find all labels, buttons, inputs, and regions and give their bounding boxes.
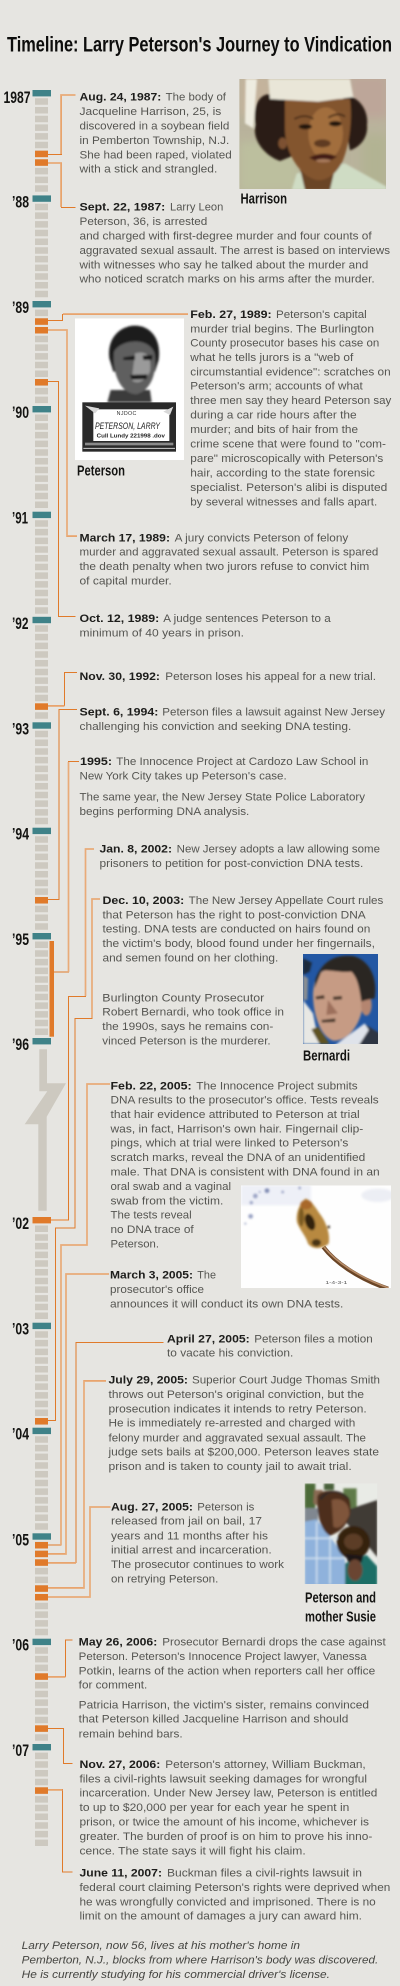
event: Sept. 22, 1987: aggravated sexual assault. The arrest is based on interviews: [80, 245, 390, 257]
year labels: ’06: [12, 1637, 29, 1655]
text: Burlington County Prosecutor: vinced Peterson is the murderer.: [102, 1035, 271, 1047]
event: Oct. 12, 1989: minimum of 40 years in prison.: [80, 627, 244, 639]
closing italic note: [22, 1940, 378, 1981]
event: Aug. 24, 1987: in Pemberton Township, N.J.: [80, 135, 229, 147]
time break lightning shape: [25, 1049, 66, 1211]
event: Feb. 22, 2005: pings, which at trial were linked to Peterson's: [110, 1138, 348, 1150]
text: Burlington County Prosecutor: Burlington County Prosecutor: [102, 992, 265, 1004]
event: Feb. 27, 1989: murder trial begins. The Burlington: [190, 323, 374, 335]
event: July 29, 2005: [107, 1374, 380, 1473]
event: Sept. 22, 1987: Sept. 22, 1987:: [80, 202, 165, 214]
year labels: [4, 89, 30, 1760]
event: Feb. 22, 2005: swab from the victim.: [110, 1195, 223, 1207]
event: Aug. 27, 2005: Peterson is: [197, 1501, 254, 1513]
event: Feb. 27, 1989: during a car ride hours after the: [190, 410, 357, 422]
photo: Bernardi: [303, 954, 380, 1047]
event: May 26, 2006: Prosecutor Bernardi drops the case against: [162, 1637, 386, 1649]
text: Burlington County Prosecutor: Robert Bernardi, who took office in: [102, 1007, 284, 1019]
event: Nov. 27, 2006: cence. The state says it will fight his claim.: [80, 1845, 306, 1857]
photo: Harrison: [239, 75, 388, 192]
photo: Peterson mugshot: PETERSON, LARRY: [95, 421, 161, 431]
event: Feb. 22, 2005: scratch marks, reveal the DNA of an unidentified: [110, 1152, 365, 1164]
event: Nov. 30, 1992: Peterson loses his appeal for a new trial.: [165, 671, 376, 683]
event: Feb. 27, 1989: specialist. Peterson's alibi is disputed: [190, 482, 387, 494]
event: May 26, 2006: Peterson. Peterson's Innocence Project lawyer, Vanessa: [79, 1651, 367, 1663]
year labels: ’05: [12, 1531, 29, 1549]
monthly grey ticks: [35, 98, 48, 1846]
event: March 17, 1989: murder and aggravated sexual assault. Peterson is spared: [80, 547, 378, 559]
photo: hair root micrograph: [241, 1185, 395, 1289]
event: Nov. 30, 1992: Nov. 30, 1992:: [80, 671, 160, 683]
year labels: ’03: [12, 1321, 29, 1339]
event: June 11, 2007: limit on the amount of damages a jury can award him.: [80, 1911, 362, 1923]
text: Burlington County Prosecutor: the 1990s, says he remains con-: [102, 1021, 274, 1033]
event: Feb. 27, 1989: crime scene that were found to "com-: [190, 439, 387, 451]
event: Nov. 27, 2006: greater. The burden of proof is on him to prove his inno-: [80, 1831, 373, 1843]
event: Feb. 22, 2005: oral swab and a vaginal: [110, 1181, 231, 1193]
event: Feb. 27, 1989: [189, 309, 392, 508]
year labels: ’90: [12, 404, 29, 422]
event: Oct. 12, 1989: A judge sentences Peterson to a: [163, 613, 331, 625]
event: March 17, 1989: the death penalty when two jurors refuse to convict him: [80, 561, 369, 573]
event: Nov. 30, 1992: [80, 671, 376, 683]
event: Dec. 10, 2003: The New Jersey Appellate Court rules: [189, 895, 383, 907]
event: Sept. 22, 1987: Peterson, 36, is arrested: [80, 216, 207, 228]
event: Aug. 27, 2005: years and 11 months after his: [111, 1530, 268, 1542]
year labels: ’04: [12, 1426, 30, 1444]
event: July 29, 2005: throws out Peterson's original conviction, but the: [108, 1389, 364, 1401]
event: Jan. 8, 2002: prisoners to petition for post-conviction DNA tests.: [100, 858, 363, 870]
event: Feb. 22, 2005: The tests reveal: [110, 1210, 192, 1222]
event: Sept. 6, 1994: [80, 706, 386, 733]
teal year markers: [32, 90, 51, 1750]
year labels: ’94: [12, 826, 30, 844]
event: Aug. 24, 1987: Jacqueline Harrison, 25, is: [80, 106, 221, 118]
event: Aug. 27, 2005: [111, 1501, 285, 1586]
year labels: 1987: [4, 89, 30, 107]
event: Dec. 10, 2003: and semen found on her clothing.: [102, 952, 278, 964]
event: June 11, 2007: June 11, 2007:: [80, 1867, 162, 1879]
event: Nov. 27, 2006: [80, 1759, 377, 1857]
connector lines: [48, 95, 188, 1872]
year labels: ’91: [12, 510, 28, 528]
caption: Peterson and mother Susie: Peterson and: [305, 1590, 376, 1607]
year labels: ’88: [12, 193, 29, 211]
text: Burlington County Prosecutor: [102, 992, 284, 1047]
event: April 27, 2005: April 27, 2005:: [167, 1333, 250, 1345]
event: May 26, 2006: Potkin, learns of the action when reporters call her office: [79, 1665, 375, 1677]
caption: Bernardi: Bernardi: [303, 1048, 350, 1065]
event: Sept. 22, 1987: and charged with first-degree murder and four counts of: [80, 231, 372, 243]
event: July 29, 2005: felony murder and aggravated sexual assault. The: [108, 1432, 366, 1444]
event: Aug. 27, 2005: on retrying Peterson.: [111, 1574, 218, 1586]
event: Jan. 8, 2002: New Jersey adopts a law allowing some: [177, 844, 380, 856]
event: Aug. 24, 1987: Aug. 24, 1987:: [80, 92, 161, 104]
event: Aug. 27, 2005: released from jail on bail, 17: [111, 1516, 262, 1528]
year labels: ’07: [12, 1742, 29, 1760]
event: Feb. 27, 1989: Peterson's capital: [276, 309, 367, 321]
event: Sept. 22, 1987: who noticed scratch marks on his arms after the murder.: [78, 274, 375, 286]
event: Feb. 22, 2005: male. That DNA is consistent with DNA found in an: [110, 1167, 380, 1179]
event: Oct. 12, 1989: Oct. 12, 1989:: [80, 613, 159, 625]
event: Sept. 6, 1994: Sept. 6, 1994:: [80, 706, 158, 718]
event: Dec. 10, 2003: Dec. 10, 2003:: [102, 895, 184, 907]
event: Feb. 27, 1989: circumstantial evidence": scratches on: [190, 366, 391, 378]
event: May 26, 2006: for comment.: [79, 1680, 147, 1692]
event: May 26, 2006: [79, 1637, 386, 1740]
event: Aug. 27, 2005: The prosecutor continues to work: [111, 1559, 285, 1571]
event: Aug. 24, 1987: discovered in a soybean field: [80, 120, 229, 132]
year labels: ’92: [12, 615, 28, 633]
event: Sept. 6, 1994: Peterson files a lawsuit against New Jersey: [162, 706, 386, 718]
event: Feb. 27, 1989: three men say they heard Peterson say: [190, 395, 392, 407]
year labels: ’96: [12, 1036, 29, 1054]
event: Nov. 27, 2006: to up to $20,000 per year for each year he spent in: [80, 1802, 349, 1814]
timeline spine: [25, 90, 66, 1846]
event: March 3, 2005: March 3, 2005:: [110, 1270, 193, 1282]
orange event markers: [32, 151, 54, 1794]
event: Feb. 27, 1989: hair, according to the state forensic: [190, 468, 376, 480]
event: Aug. 27, 2005: Aug. 27, 2005:: [111, 1501, 193, 1513]
year labels: ’93: [12, 720, 29, 738]
event: March 17, 1989: of capital murder.: [80, 575, 172, 587]
photo: Peterson and mother Susie: [305, 1483, 377, 1587]
event: Aug. 24, 1987: [78, 92, 232, 176]
event: Feb. 22, 2005: [109, 1080, 380, 1251]
event: Sept. 6, 1994: challenging his conviction and seeking DNA testing.: [80, 721, 351, 733]
event: Feb. 22, 2005: that hair evidence attributed to Peterson at trial: [110, 1109, 360, 1121]
event: Nov. 27, 2006: Nov. 27, 2006:: [80, 1759, 160, 1771]
event: April 27, 2005: [167, 1333, 373, 1360]
event: Nov. 27, 2006: files a civil-rights lawsuit seeking damages for wrongful: [80, 1773, 367, 1785]
event: Aug. 24, 1987: She had been raped, violated: [80, 149, 232, 161]
event: May 26, 2006: that Peterson killed Jacqueline Harrison and should: [79, 1714, 348, 1726]
event: March 17, 1989: [80, 532, 378, 587]
event: 1995: begins performing DNA analysis.: [80, 806, 249, 818]
year labels: ’89: [12, 299, 29, 317]
event: Feb. 22, 2005: The Innocence Project submits: [196, 1080, 358, 1092]
event: Jan. 8, 2002: [100, 844, 380, 870]
event: March 17, 1989: March 17, 1989:: [80, 532, 170, 544]
event: April 27, 2005: Peterson files a motion: [254, 1333, 373, 1345]
year labels: ’02: [12, 1215, 29, 1233]
event: Feb. 22, 2005: was, in fact, Harrison's own hair. Fingernail clip-: [109, 1123, 364, 1135]
event: Dec. 10, 2003: that Peterson has the right to post-conviction DNA: [102, 909, 367, 921]
photo: hair root micrograph: 1-4-3-1: [325, 1280, 348, 1286]
event: Dec. 10, 2003: [102, 895, 383, 964]
event: 1995: [80, 756, 368, 818]
event: Nov. 27, 2006: Peterson's attorney, William Buckman,: [165, 1759, 366, 1771]
photo: Peterson mugshot: [75, 318, 184, 460]
caption: Peterson and mother Susie: [305, 1590, 376, 1626]
closing italic note: He is currently studying for his commercial driver's license.: [22, 1969, 330, 1981]
event: March 3, 2005: announces it will conduct its own DNA tests.: [110, 1298, 343, 1310]
event: Jan. 8, 2002: Jan. 8, 2002:: [100, 844, 172, 856]
event: Feb. 22, 2005: DNA results to the prosecutor's office. Tests reveals: [110, 1095, 379, 1107]
event: Feb. 27, 1989: Peterson's arm; accounts of what: [190, 381, 363, 393]
closing italic note: Pemberton, N.J., blocks from where Harrison's body was discovered.: [22, 1955, 378, 1967]
event: Aug. 24, 1987: The body of: [166, 92, 226, 104]
event: 1995: New York City takes up Peterson's case.: [80, 770, 287, 782]
event: June 11, 2007: [80, 1867, 390, 1923]
event: March 3, 2005: [110, 1270, 343, 1310]
event: Dec. 10, 2003: the victim's body, blood found under her fingernails,: [102, 938, 375, 950]
caption: Peterson and mother Susie: mother Susie: [305, 1609, 376, 1626]
event: Sept. 22, 1987: [78, 202, 390, 286]
photo: Peterson mugshot: Cull Lundy 221998 .dov: [97, 434, 166, 440]
event: May 26, 2006: May 26, 2006:: [79, 1637, 157, 1649]
event: May 26, 2006: remain behind bars.: [79, 1728, 183, 1740]
event: July 29, 2005: He is immediately re-arrested and charged with: [108, 1418, 355, 1430]
event: March 3, 2005: The: [197, 1270, 216, 1282]
event: June 11, 2007: federal court claiming Peterson's rights were deprived when: [80, 1882, 390, 1894]
event: Feb. 27, 1989: by several witnesses and falls apart.: [190, 496, 377, 508]
event: Aug. 24, 1987: with a stick and strangled.: [78, 164, 217, 176]
event: Feb. 22, 2005: Peterson.: [110, 1239, 159, 1251]
closing italic note: Larry Peterson, now 56, lives at his mother's home in: [22, 1940, 300, 1952]
event: Oct. 12, 1989: [80, 613, 331, 639]
event: July 29, 2005: Superior Court Judge Thomas Smith: [192, 1374, 380, 1386]
event: Sept. 22, 1987: with witnesses who say he talked about the murder and: [78, 259, 368, 271]
photo: Peterson mugshot: NJDOC: [117, 411, 137, 417]
event: Aug. 27, 2005: initial arrest and incarceration.: [111, 1545, 272, 1557]
lighter double-pixel connector segments: [48, 95, 188, 1790]
event: Feb. 22, 2005: Feb. 22, 2005:: [110, 1080, 192, 1092]
caption: Harrison: Harrison: [240, 190, 287, 207]
event: March 3, 2005: prosecutor's office: [110, 1284, 204, 1296]
event: Feb. 22, 2005: no DNA trace of: [110, 1224, 194, 1236]
event: May 26, 2006: Patricia Harrison, the victim's sister, remains convinced: [79, 1699, 369, 1711]
event: 1995: The same year, the New Jersey State Police Laboratory: [80, 791, 366, 803]
event: 1995: The Innocence Project at Cardozo Law School in: [116, 756, 368, 768]
event: June 11, 2007: Buckman files a civil-rights lawsuit in: [167, 1867, 362, 1879]
year labels: ’95: [12, 931, 29, 949]
event: Feb. 27, 1989: pare" microscopically with Peterson's: [190, 453, 383, 465]
event: March 17, 1989: A jury convicts Peterson of felony: [175, 532, 349, 544]
event: Dec. 10, 2003: testing. DNA tests are conducted on hairs found on: [102, 924, 370, 936]
caption: Peterson: Peterson: [77, 462, 125, 479]
event: July 29, 2005: judge sets bails at $200,000. Peterson leaves state: [107, 1447, 379, 1459]
event: Sept. 22, 1987: Larry Leon: [170, 202, 223, 214]
event: Feb. 27, 1989: what he tells jurors is a "web of: [189, 352, 353, 364]
event: Nov. 27, 2006: incarceration. Under New Jersey law, Peterson is entitled: [80, 1788, 377, 1800]
event: July 29, 2005: July 29, 2005:: [108, 1374, 188, 1386]
event: Feb. 27, 1989: County prosecutor bases his case on: [190, 338, 379, 350]
event: Feb. 27, 1989: Feb. 27, 1989:: [190, 309, 272, 321]
event: Nov. 27, 2006: prison, or twice the amount of his income, whichever is: [80, 1816, 369, 1828]
event: July 29, 2005: prison and is taken to county jail to await trial.: [108, 1461, 352, 1473]
event: April 27, 2005: to vacate his conviction.: [167, 1348, 293, 1360]
event: Feb. 27, 1989: murder; and bits of hair from the: [190, 424, 358, 436]
event: July 29, 2005: prosecution indicates it intends to retry Peterson.: [108, 1403, 367, 1415]
event: June 11, 2007: he was wrongfully convicted and imprisoned. There is no: [80, 1896, 376, 1908]
event: 1995: 1995:: [80, 756, 112, 768]
